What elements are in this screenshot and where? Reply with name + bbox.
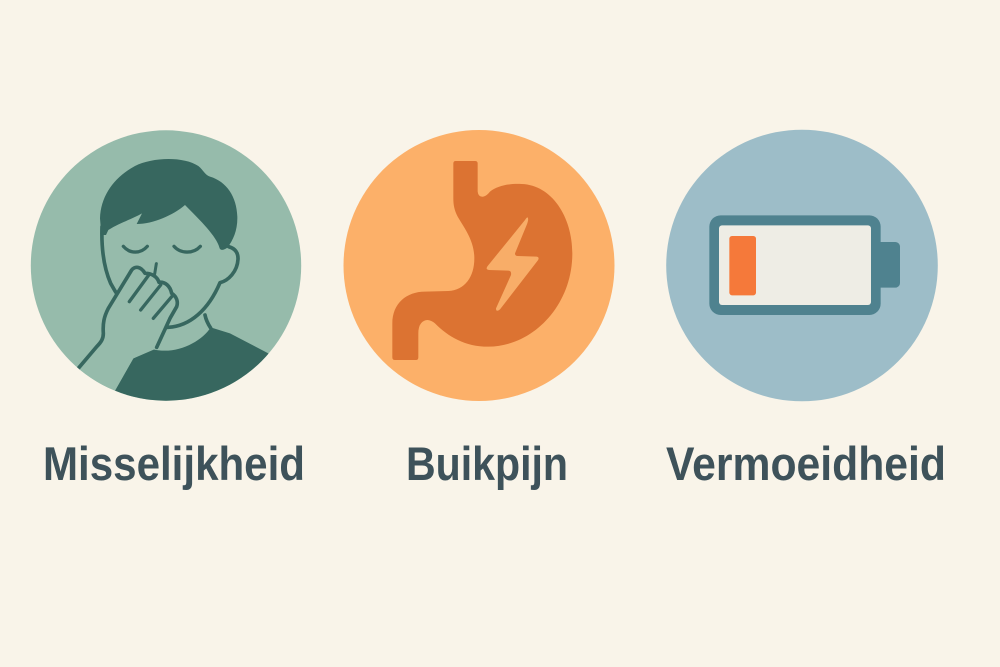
hand outline	[78, 267, 177, 368]
lightning bolt	[487, 217, 539, 311]
label: Misselijkheid: Misselijkheid	[43, 437, 305, 490]
label: Buikpijn: Buikpijn	[406, 437, 568, 490]
panel: abdominal pain	[344, 130, 614, 490]
battery body	[709, 215, 881, 315]
icon: nauseous person in green circle	[31, 130, 301, 413]
battery terminal	[873, 242, 900, 288]
finger lines	[129, 276, 172, 318]
battery interior	[719, 225, 871, 305]
hair	[100, 159, 237, 250]
panel: fatigue	[666, 130, 946, 490]
hand and forearm fill	[78, 294, 165, 390]
stomach	[392, 161, 572, 360]
low charge bar	[729, 236, 756, 295]
icon: stomach with lightning bolt in orange circle	[344, 130, 614, 401]
label: Vermoeidheid: Vermoeidheid	[666, 437, 946, 490]
panel: nausea	[31, 130, 305, 490]
face outline, ear and neck	[102, 227, 238, 328]
shirt	[115, 328, 268, 401]
icon: low battery in blue circle	[666, 130, 938, 401]
infographic canvas	[30, 130, 944, 490]
nose	[155, 264, 156, 274]
eyes	[123, 246, 200, 252]
